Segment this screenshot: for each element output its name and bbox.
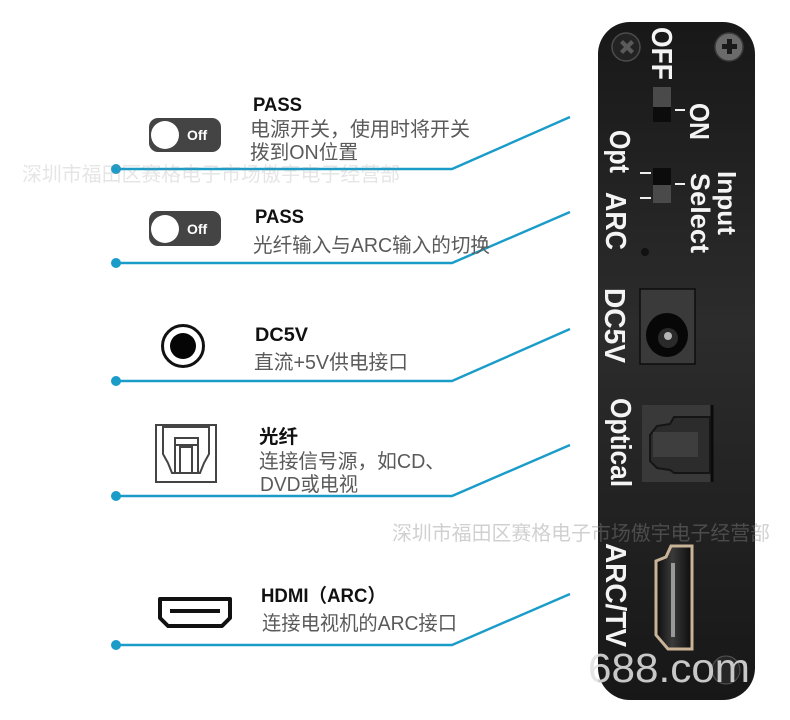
text: input select: 光纤输入与ARC输入的切换 (253, 234, 490, 257)
text: optical (259, 426, 445, 496)
text: HDMI: HDMI（ARC） (261, 585, 386, 607)
text: optical: 连接信号源，如CD、 (259, 450, 445, 473)
callout line: HDMI (111, 594, 570, 650)
label: Input: Input (712, 171, 742, 235)
tick: ON (675, 109, 685, 111)
callout line: input select (111, 212, 570, 268)
port: optical (642, 405, 713, 482)
text: input select (253, 207, 490, 257)
text: power switch: 拨到ON位置 (250, 141, 358, 164)
icon: toggle off 1 (149, 118, 221, 152)
text: HDMI (261, 585, 457, 635)
callout line: DC5V (111, 329, 570, 386)
port: DC jack (640, 289, 695, 364)
icon: toggle off 1: Off (187, 127, 208, 143)
switch: input select (653, 168, 671, 203)
icon: toggle off 2: Off (187, 221, 208, 237)
text: DC5V: 直流+5V供电接口 (254, 351, 408, 374)
text: DC5V: DC5V (255, 325, 308, 346)
text: power switch: 电源开关，使用时将开关 (250, 118, 470, 141)
label: OFF: OFF (645, 27, 677, 80)
label: ARC: ARC (599, 192, 631, 250)
callout line: power switch (111, 117, 570, 174)
icon: HDMI port (160, 599, 230, 626)
port: HDMI (656, 546, 692, 649)
icon: toggle off 2 (149, 211, 221, 246)
text: power switch (250, 95, 470, 164)
icon: DC jack (162, 326, 204, 366)
text: optical: DVD或电视 (260, 473, 358, 496)
label: Optical: Optical (604, 398, 636, 487)
icon: optical port (156, 425, 216, 482)
icon: bottom screw (712, 656, 740, 684)
watermark: domain: 688.com (588, 645, 750, 691)
icon: top right screw (715, 33, 743, 61)
switch: power (653, 87, 671, 122)
icon: top left screw (612, 33, 640, 61)
icon: HDMI slot (170, 609, 220, 613)
text: HDMI: 连接电视机的ARC接口 (262, 612, 457, 635)
watermark: shop name 1: 深圳市福田区赛格电子市场傲宇电子经营部 (22, 158, 400, 187)
label: Opt: Opt (603, 130, 635, 173)
text: power switch: PASS (253, 95, 302, 116)
ticks: input select (640, 172, 685, 199)
text: optical: 光纤 (259, 426, 298, 448)
label: Select: Select (685, 173, 715, 253)
icon: small hole (641, 248, 649, 256)
watermark: shop name 2: 深圳市福田区赛格电子市场傲宇电子经营部 (392, 517, 770, 546)
label: ON: ON (684, 103, 715, 140)
callout line: optical (111, 445, 570, 501)
label: DC5V: DC5V (598, 288, 630, 364)
text: input select: PASS (255, 207, 304, 228)
panel: device back panel (598, 22, 755, 700)
text: DC5V (254, 325, 408, 374)
label: ARC/TV: ARC/TV (599, 543, 631, 648)
